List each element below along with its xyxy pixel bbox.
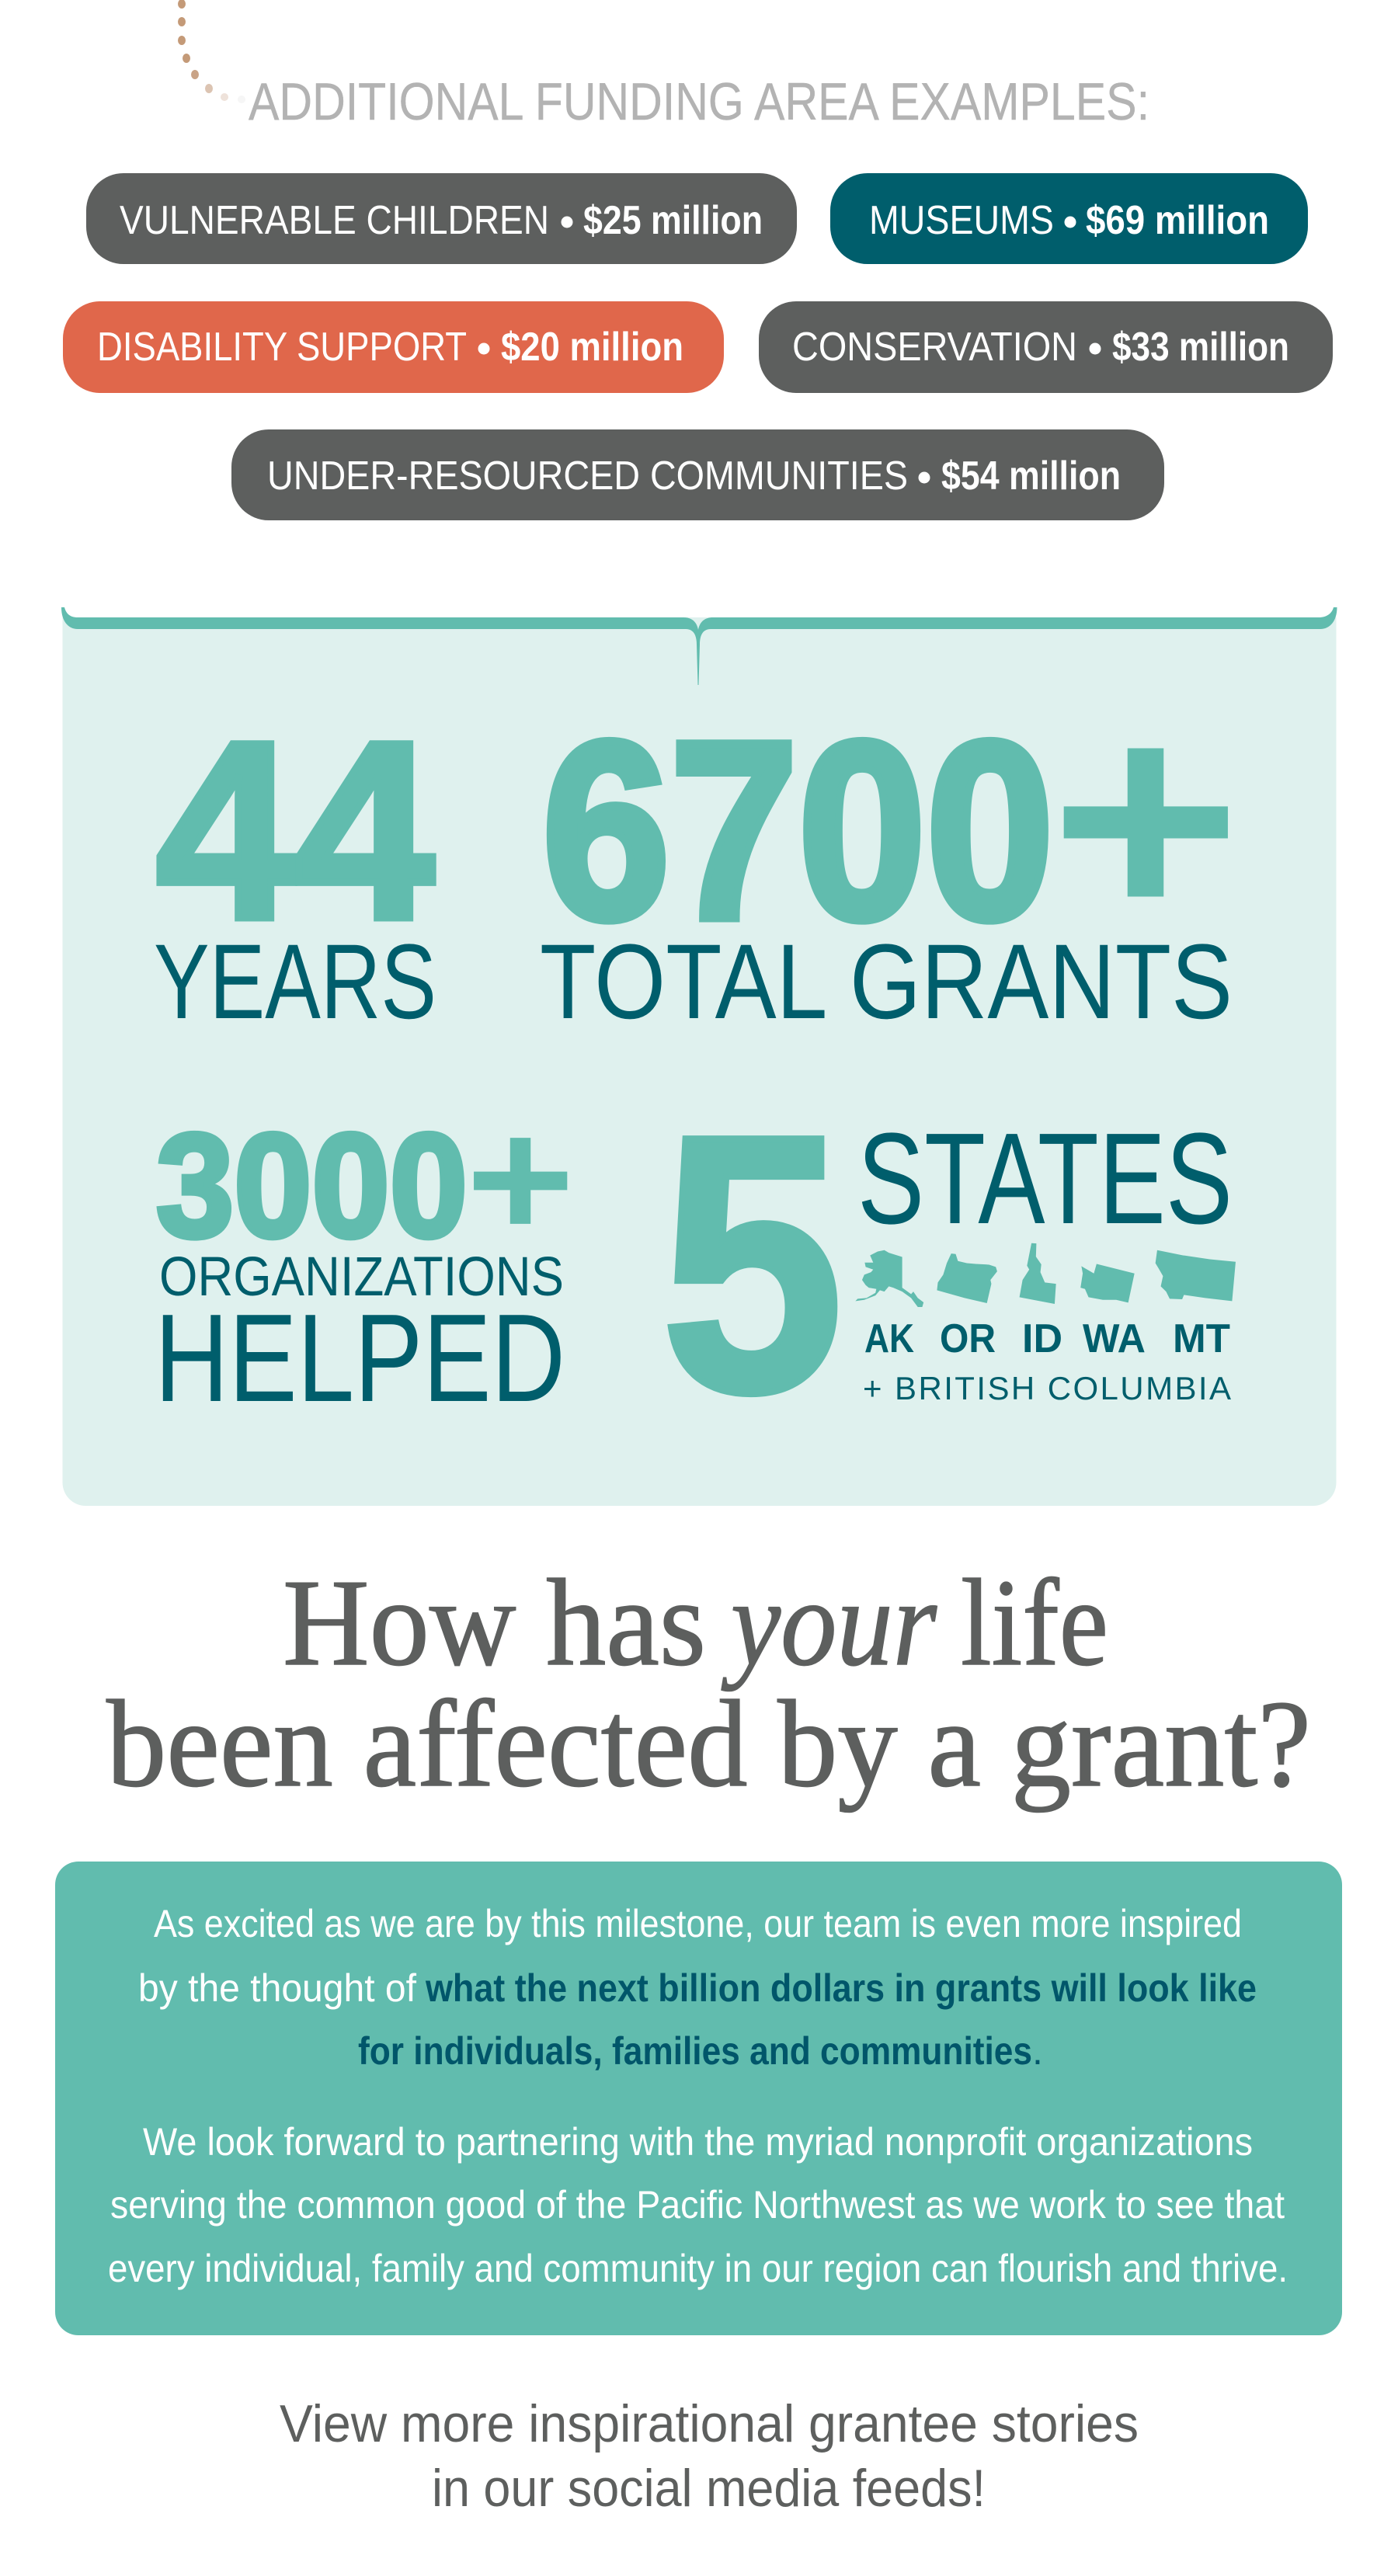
pill: conservation [759,301,1333,393]
state abbreviations [864,1316,1230,1361]
panel: milestone message: for individuals, families and communities [358,2029,1032,2073]
pill: museums [830,173,1308,264]
heading: how has your life: life [961,1553,1108,1691]
stat: 5 states: 5 [661,1060,843,1468]
stat: 6700+ total grants [540,655,1241,1041]
stat: 44 years: 44 [156,690,436,972]
pill: vulnerable children: $25 million [583,198,763,243]
heading: how has your life: How has [283,1553,706,1691]
panel: milestone message: As excited as we are by this milestone, our team is even more inspired [154,1902,1242,1945]
stat: 3000+ organizations helped: + [466,1085,575,1274]
pill: museums: MUSEUMS [869,198,1054,243]
panel: milestone message: by the thought of [138,1966,416,2010]
panel: statistics [61,607,1337,1506]
stat: 3000+ organizations helped: 3000 [156,1104,468,1268]
state abbreviations: AK [864,1316,914,1361]
stat: 44 years: YEARS [154,923,436,1041]
stat: 5 states: STATES [857,1107,1233,1251]
brace [61,607,1337,685]
pill: disability support [63,301,724,393]
panel: milestone message: serving the common good of the Pacific Northwest as we work to see that [110,2183,1285,2227]
pill: conservation: $33 million [1112,325,1289,370]
heading: how has your life: your [721,1553,937,1691]
heading: how has your life: been affected by a grant? [106,1674,1311,1813]
stat: 3000+ organizations helped: HELPED [155,1288,565,1428]
dotted connector [178,0,245,103]
pill: vulnerable children [86,173,797,264]
pill: under-resourced communities: UNDER-RESOURCED COMMUNITIES [267,454,908,499]
closing call to action [280,2394,1139,2518]
pill: vulnerable children: VULNERABLE CHILDREN [120,198,549,243]
stat: 3000+ organizations helped [155,1085,575,1428]
stat: 6700+ total grants: + [1050,655,1241,982]
panel: milestone message: . [1032,2029,1043,2073]
panel: milestone message: what the next billion dollars in grants will look like [425,1966,1257,2010]
closing call to action: in our social media feeds! [432,2459,986,2518]
pill: disability support: $20 million [501,325,683,370]
pill: under-resourced communities: $54 million [941,454,1121,499]
heading: how has your life [106,1553,1311,1813]
panel: milestone message [55,1862,1342,2335]
pill: disability support: DISABILITY SUPPORT [97,325,467,370]
state abbreviations: ID [1022,1316,1062,1361]
closing call to action: View more inspirational grantee stories [280,2394,1139,2453]
british columbia note: + BRITISH COLUMBIA [863,1370,1231,1406]
stat: 6700+ total grants: 6700 [542,690,1054,972]
state abbreviations: MT [1173,1316,1230,1361]
state abbreviations: WA [1083,1316,1146,1361]
panel: milestone message: every individual, family and community in our region can flourish and thrive. [108,2247,1288,2290]
pill: museums: $69 million [1086,198,1269,243]
state abbreviations: OR [940,1316,996,1361]
stat: 5 states [661,1060,1236,1468]
stat: 3000+ organizations helped: ORGANIZATIONS [159,1246,564,1308]
pill: under-resourced communities [231,429,1164,520]
heading: additional funding: ADDITIONAL FUNDING AREA EXAMPLES: [249,72,1149,131]
stat: 6700+ total grants: TOTAL GRANTS [540,923,1233,1041]
state map icons [855,1243,1236,1307]
pill: conservation: CONSERVATION [792,325,1077,370]
panel: milestone message: We look forward to partnering with the myriad nonprofit organizations [143,2120,1253,2164]
